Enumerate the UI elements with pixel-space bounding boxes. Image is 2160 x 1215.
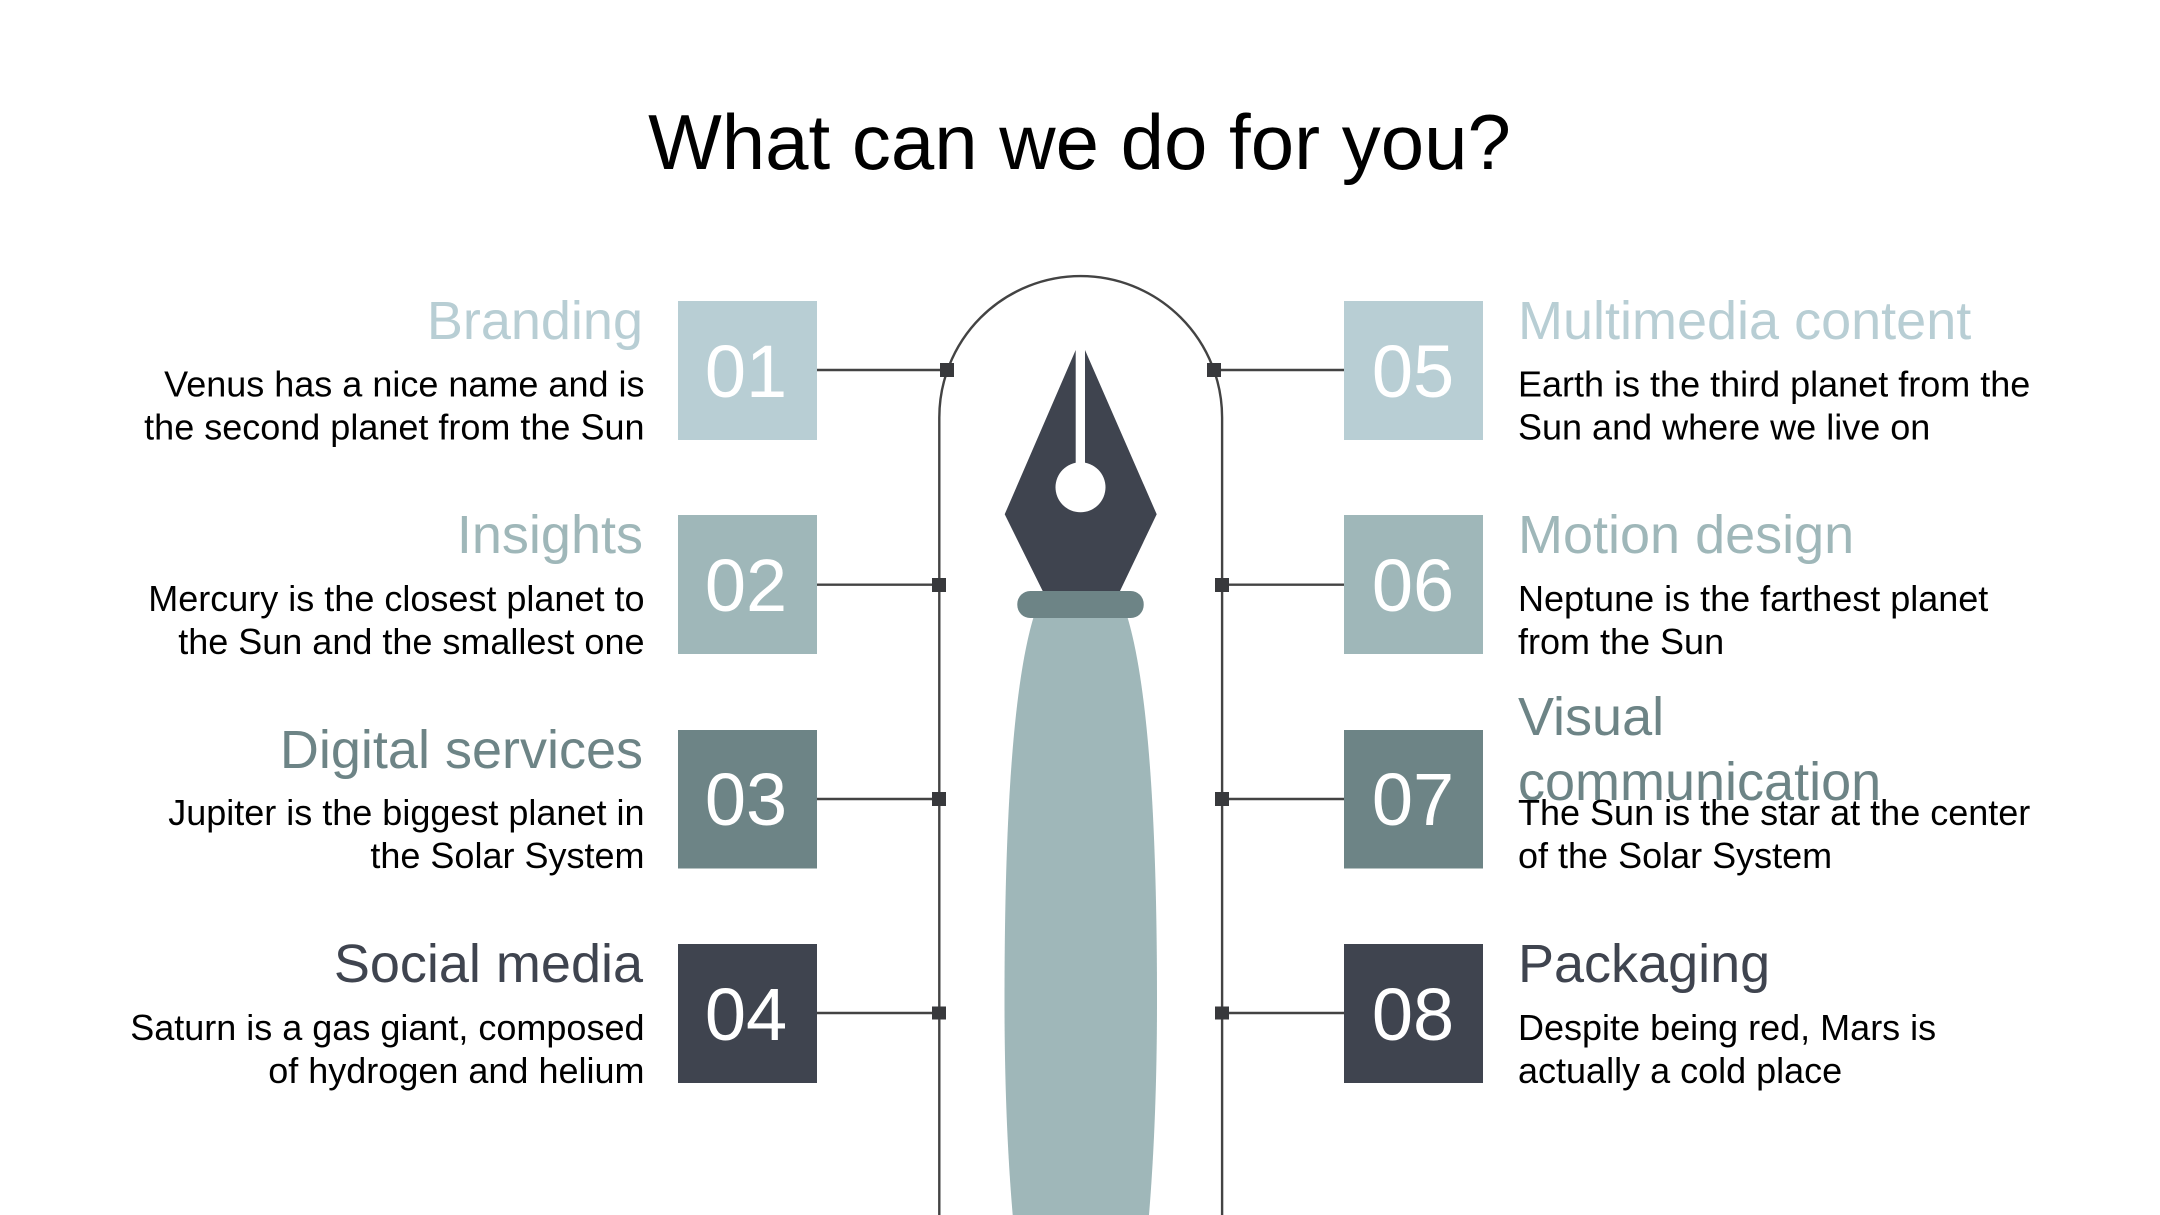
heading 06: Motion design <box>1518 505 1854 565</box>
item 06 <box>1215 505 1988 662</box>
description 04: Saturn is a gas giant, composed <box>130 1007 644 1048</box>
pen barrel <box>1004 618 1157 1215</box>
description 06: Neptune is the farthest planet <box>1518 578 1988 619</box>
description 07: The Sun is the star at the center <box>1518 792 2030 833</box>
item 08 <box>1215 934 1936 1091</box>
connector 05 <box>1207 363 1344 377</box>
number box 03: 03 <box>705 758 787 841</box>
pen illustration <box>1004 350 1157 1215</box>
description 01: Venus has a nice name and is <box>164 363 644 404</box>
connector 02 <box>817 578 946 592</box>
connector 06 <box>1215 578 1344 592</box>
number box 01: 01 <box>705 330 787 413</box>
description 06: from the Sun <box>1518 621 1724 662</box>
description 05: Earth is the third planet from the <box>1518 363 2030 404</box>
number box 05: 05 <box>1372 330 1454 413</box>
description 03: the Solar System <box>370 835 644 876</box>
pen nib <box>1005 350 1157 591</box>
connector 04 <box>817 1006 946 1020</box>
description 03: Jupiter is the biggest planet in <box>168 792 644 833</box>
item 03 <box>168 720 946 876</box>
title: What can we do for you? <box>648 98 1511 186</box>
description 07: of the Solar System <box>1518 835 1832 876</box>
pen collar <box>1017 591 1144 618</box>
item 01 <box>144 291 954 447</box>
description 08: Despite being red, Mars is <box>1518 1007 1936 1048</box>
nib hole <box>1056 462 1106 512</box>
arch outline around pen <box>939 276 1222 1215</box>
description 02: Mercury is the closest planet to <box>148 578 644 619</box>
item 04 <box>130 934 946 1091</box>
heading 05: Multimedia content <box>1518 291 1971 351</box>
heading 07: Visual <box>1518 687 1664 747</box>
heading 08: Packaging <box>1518 934 1770 994</box>
number box 04: 04 <box>705 973 787 1056</box>
connector 01 <box>817 363 954 377</box>
number box 08 <box>1344 944 1483 1083</box>
heading 03: Digital services <box>280 720 643 780</box>
number box 06: 06 <box>1372 544 1454 627</box>
heading 04: Social media <box>334 934 644 994</box>
number box 01 <box>678 301 817 440</box>
number box 05 <box>1344 301 1483 440</box>
number box 07: 07 <box>1372 758 1454 841</box>
number box 06 <box>1344 515 1483 654</box>
item 07 <box>1215 687 2030 876</box>
heading 01: Branding <box>427 291 643 351</box>
connector 08 <box>1215 1006 1344 1020</box>
item 02 <box>148 505 946 662</box>
description 02: the Sun and the smallest one <box>178 621 644 662</box>
connector 03 <box>817 792 946 806</box>
number box 07 <box>1344 730 1483 868</box>
connector 07 <box>1215 792 1344 806</box>
number box 08: 08 <box>1372 973 1454 1056</box>
description 04: of hydrogen and helium <box>268 1050 644 1091</box>
description 01: the second planet from the Sun <box>144 406 644 447</box>
number box 02 <box>678 515 817 654</box>
heading 02: Insights <box>457 505 643 565</box>
description 08: actually a cold place <box>1518 1050 1842 1091</box>
heading 07: communication <box>1518 752 1881 812</box>
number box 02: 02 <box>705 544 787 627</box>
item 05 <box>1207 291 2030 447</box>
description 05: Sun and where we live on <box>1518 406 1930 447</box>
number box 04 <box>678 944 817 1083</box>
number box 03 <box>678 730 817 868</box>
